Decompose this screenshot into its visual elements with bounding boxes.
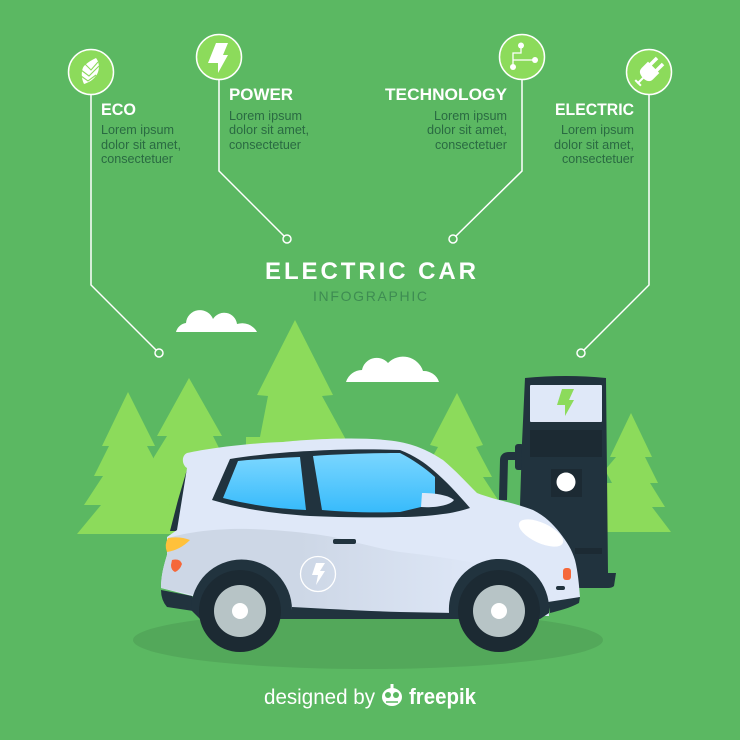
front window	[313, 453, 435, 512]
pump panel	[530, 430, 602, 457]
callout: eco	[68, 50, 181, 166]
text: eco body: dolor sit amet,	[101, 138, 181, 152]
front wheel	[449, 559, 549, 652]
text: electric body: consectetuer	[562, 152, 634, 166]
pump vent	[575, 548, 602, 554]
charging station	[503, 376, 616, 588]
front vent	[556, 586, 565, 590]
rear wheel	[191, 560, 292, 652]
rear window	[223, 457, 306, 510]
front indicator	[563, 568, 571, 580]
rear window edge	[170, 466, 188, 531]
handle	[515, 444, 524, 470]
headlight	[515, 514, 567, 552]
heading: electric: ELECTRIC	[555, 100, 634, 119]
rear reflector	[171, 560, 182, 572]
text: power body: dolor sit amet,	[229, 123, 309, 137]
icon: circuit	[500, 34, 544, 80]
pump button	[551, 469, 582, 497]
car body	[161, 439, 580, 616]
icon: freepik logo	[382, 684, 402, 706]
footer credit: freepik	[409, 684, 477, 709]
pump screen	[530, 385, 602, 422]
text: technology body: consectetuer	[435, 138, 507, 152]
text: eco body	[101, 123, 181, 166]
side mirror	[421, 493, 454, 507]
subtitle: INFOGRAPHIC	[313, 288, 427, 304]
door handle	[333, 539, 356, 544]
heading: technology: TECHNOLOGY	[385, 85, 508, 104]
icon: plug	[626, 50, 672, 94]
ground shadow	[133, 611, 603, 669]
bumper and sill	[161, 590, 580, 619]
callout: power	[196, 34, 309, 152]
text: electric body: Lorem ipsum	[561, 123, 634, 137]
text: power body	[229, 109, 309, 152]
heading: power: POWER	[229, 85, 293, 104]
cloud left	[176, 310, 257, 332]
callout: electric	[554, 50, 672, 166]
car	[161, 439, 580, 652]
text: eco body: Lorem ipsum	[101, 123, 174, 137]
car lower panel	[161, 529, 480, 616]
text: technology body: Lorem ipsum	[434, 109, 507, 123]
footer credit	[264, 684, 477, 709]
window frame	[212, 449, 470, 517]
callout lines	[91, 80, 649, 357]
text: electric body: dolor sit amet,	[554, 138, 634, 152]
title: ELECTRIC CAR	[265, 258, 476, 285]
forest of trees	[77, 320, 671, 534]
hose	[503, 456, 518, 500]
footer credit: designed by	[264, 686, 375, 709]
icon: lightning bolt	[196, 34, 242, 80]
tail light	[166, 537, 190, 552]
text: technology body	[427, 109, 507, 152]
text: power body: consectetuer	[229, 138, 301, 152]
heading: eco: ECO	[101, 100, 136, 119]
text: power body: Lorem ipsum	[229, 109, 302, 123]
cloud right	[346, 357, 439, 382]
text: electric body	[554, 123, 634, 166]
pump body	[520, 376, 616, 588]
icon: pump bolt	[557, 389, 574, 416]
text: technology body: dolor sit amet,	[427, 123, 507, 137]
callout: technology	[385, 34, 544, 152]
text: eco body: consectetuer	[101, 152, 173, 166]
icon: leaf	[68, 50, 114, 94]
icon: door bolt badge	[300, 556, 336, 592]
